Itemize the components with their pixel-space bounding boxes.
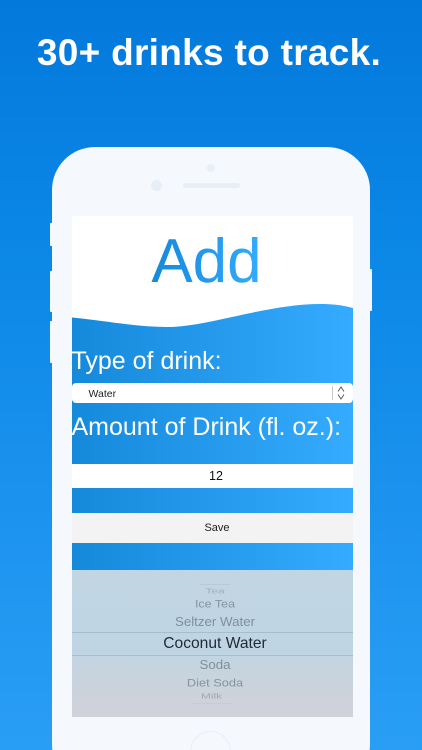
icon: front camera bbox=[151, 180, 162, 191]
phone side button: volume down bbox=[50, 321, 53, 363]
picker item: seltzer water: Seltzer Water bbox=[175, 614, 255, 629]
phone body bbox=[52, 147, 370, 750]
phone side button: power bbox=[369, 269, 372, 311]
button: save: Save bbox=[204, 522, 230, 534]
heading: Add: Add bbox=[151, 227, 261, 296]
picker bbox=[72, 570, 352, 717]
phone side button: mute bbox=[50, 223, 53, 246]
dropdown value: Water bbox=[88, 388, 116, 400]
picker item: tea: Tea bbox=[205, 587, 225, 595]
input: amount bbox=[72, 464, 352, 488]
picker item: ice tea: Ice Tea bbox=[195, 598, 235, 610]
label: amount of drink: Amount of Drink (fl. oz.): bbox=[72, 413, 341, 441]
picker bottom selection line bbox=[72, 655, 352, 656]
picker item: milk: Milk bbox=[201, 692, 222, 700]
picker item: soda: Soda bbox=[199, 657, 231, 672]
icon: home button bbox=[190, 731, 231, 750]
label: type of drink: Type of drink: bbox=[72, 347, 222, 375]
picker top selection line bbox=[72, 632, 352, 633]
dropdown: water bbox=[72, 383, 352, 403]
title: 30+ drinks to track. bbox=[37, 32, 381, 73]
screen bbox=[72, 216, 352, 717]
picker item: diet soda: Diet Soda bbox=[187, 676, 243, 689]
picker selected: coconut water: Coconut Water bbox=[163, 635, 267, 652]
input: amount: 12 bbox=[209, 468, 223, 482]
phone side button: volume up bbox=[50, 271, 53, 312]
icon: speaker bbox=[183, 183, 240, 188]
dropdown divider bbox=[332, 386, 333, 400]
icon: proximity sensor bbox=[207, 164, 215, 172]
icon: dropdown arrows bbox=[338, 386, 344, 400]
picker faint top edge bbox=[200, 584, 230, 585]
button: save bbox=[72, 513, 352, 543]
picker faint bottom edge bbox=[190, 703, 232, 704]
